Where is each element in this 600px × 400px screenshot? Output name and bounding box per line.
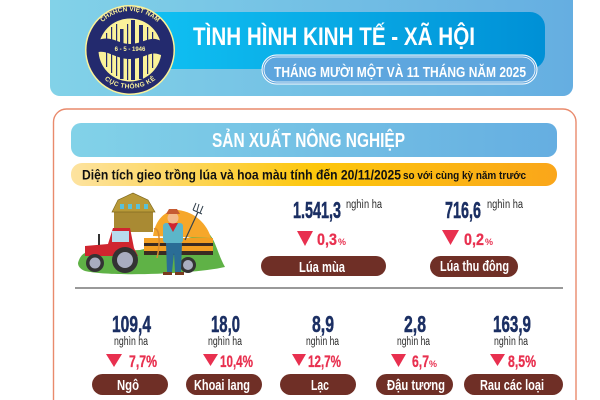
section heading: SẢN XUẤT NÔNG NGHIỆP	[212, 128, 405, 152]
stat: Khoai lang: 10,4%	[220, 352, 253, 371]
date bar	[71, 163, 557, 186]
title: TÌNH HÌNH KINH TẾ - XÃ HỘI	[193, 21, 475, 51]
stat: Khoai lang: nghìn ha	[208, 336, 242, 348]
stat: Lạc: 12,7%	[308, 352, 341, 371]
stat: Lúa mùa	[261, 197, 386, 276]
stat: Lúa thu đông: nghìn ha	[487, 199, 523, 211]
stat: Ngô	[92, 311, 168, 395]
stat: Đậu tương: %	[429, 359, 437, 369]
stat: Lúa thu đông: 716,6	[445, 197, 481, 223]
date bar: so với cùng kỳ năm trước	[403, 170, 526, 182]
stat: Khoai lang	[186, 311, 262, 395]
stat: Ngô: Ngô	[117, 377, 139, 394]
stat: Lúa thu đông	[430, 197, 523, 277]
subtitle pill: THÁNG MƯỜI MỘT VÀ 11 THÁNG NĂM 2025	[274, 63, 526, 81]
panel: agricultural production	[54, 109, 576, 400]
stat: Lúa thu đông: Lúa thu đông	[440, 258, 509, 275]
stat: Đậu tương: 6,7	[412, 352, 429, 371]
stat: Đậu tương: Đậu tương	[387, 377, 445, 394]
stat: Rau các loại: Rau các loại	[480, 377, 544, 394]
section heading	[71, 123, 557, 157]
stat: Lạc: Lạc	[311, 377, 329, 394]
stat: Lúa mùa: 1.541,3	[293, 197, 341, 223]
logo: CHXHCN VIỆT NAM	[100, 6, 160, 22]
title bar	[150, 12, 545, 69]
stat: Ngô: 109,4	[112, 311, 151, 337]
logo: 6 - 5 - 1946	[115, 47, 146, 53]
stat: Đậu tương: nghìn ha	[397, 336, 430, 348]
stat: Ngô: nghìn ha	[114, 336, 148, 348]
subtitle pill	[262, 55, 537, 84]
stat: Đậu tương: 2,8	[404, 311, 426, 337]
stat: Lúa mùa: %	[338, 237, 346, 247]
stat: Khoai lang: Khoai lang	[194, 377, 250, 394]
date bar: Diện tích gieo trồng lúa và hoa màu tính đến 20/11/2025	[82, 166, 401, 182]
stat: Lúa thu đông: 0,2	[464, 230, 484, 249]
stat: Lạc: 8,9	[312, 311, 334, 337]
logo	[85, 5, 175, 95]
stat: Lúa thu đông: %	[485, 237, 493, 247]
stat: Rau các loại: 8,5%	[508, 352, 536, 371]
stat: Đậu tương	[376, 311, 453, 395]
stat: Khoai lang: 18,0	[211, 311, 240, 337]
header panel	[50, 0, 573, 96]
stat: Lúa mùa: nghìn ha	[346, 199, 382, 211]
logo: CỤC THỐNG KÊ	[105, 76, 156, 88]
illustration: farmer and tractor	[78, 193, 225, 275]
stat: Rau các loại	[464, 311, 563, 395]
stat: Ngô: 7,7%	[129, 352, 157, 371]
stat: Rau các loại: nghìn ha	[494, 336, 528, 348]
stat: Lúa mùa: 0,3	[317, 230, 337, 249]
stat: Lạc	[280, 311, 356, 395]
stat: Lạc: nghìn ha	[306, 336, 339, 348]
stat: Lúa mùa: Lúa mùa	[299, 259, 345, 276]
stat: Rau các loại: 163,9	[493, 311, 531, 337]
